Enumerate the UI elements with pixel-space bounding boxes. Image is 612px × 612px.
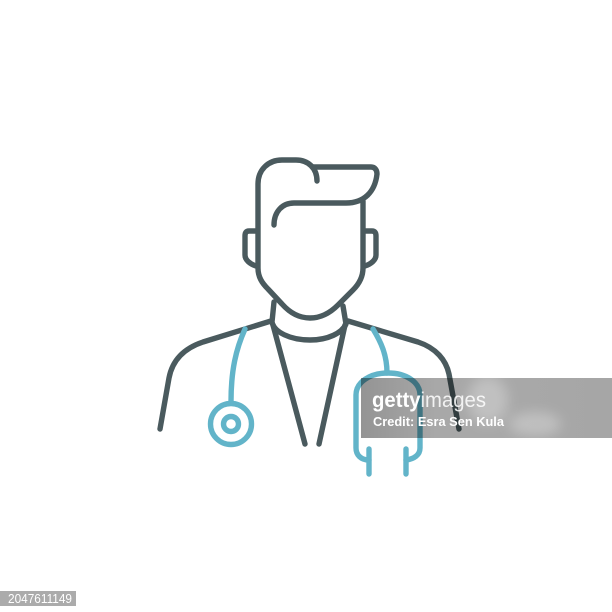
- watermark logo text: gettyimages: [372, 389, 486, 412]
- head and face outline: [258, 160, 363, 318]
- left ear: [245, 231, 257, 266]
- image id label: 2047611149: [8, 592, 72, 606]
- neck and collar: [272, 302, 346, 340]
- watermark credit text: Credit: Esra Sen Kula: [373, 415, 505, 429]
- stethoscope left ear tip: [366, 449, 372, 474]
- stethoscope tube left: [231, 329, 245, 402]
- right ear: [364, 231, 376, 266]
- icon: doctor line figure: [160, 160, 459, 474]
- stethoscope headset: [356, 373, 420, 460]
- stethoscope chest piece: [210, 404, 252, 444]
- stethoscope right ear tip: [403, 449, 409, 474]
- right lapel: [319, 325, 345, 444]
- watermark banner: [361, 376, 612, 438]
- hair quiff: [274, 167, 377, 225]
- left lapel: [273, 325, 305, 444]
- right shoulder: [348, 321, 459, 429]
- left shoulder: [160, 321, 271, 429]
- stethoscope tube right: [373, 329, 387, 373]
